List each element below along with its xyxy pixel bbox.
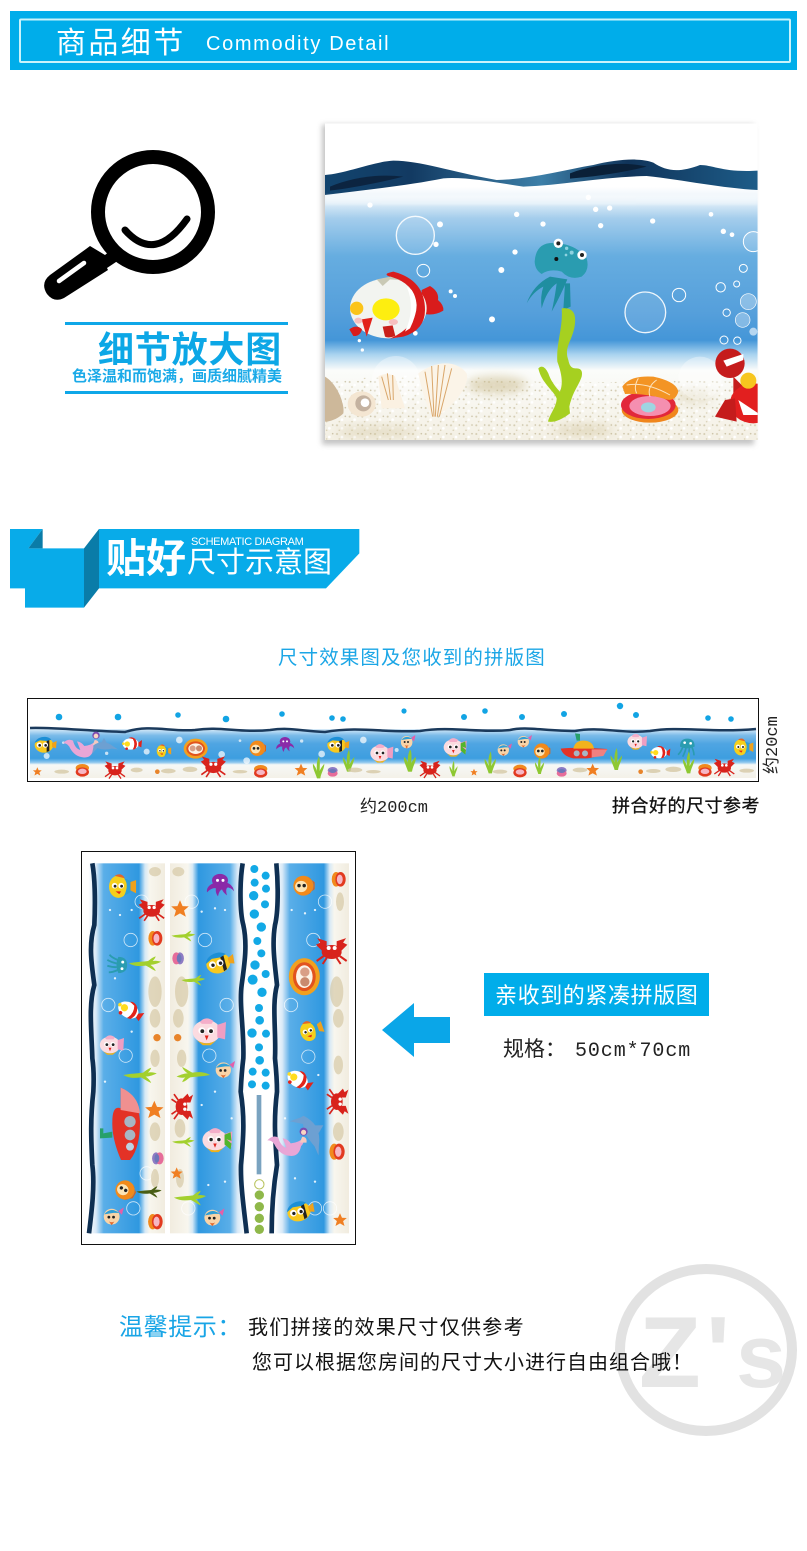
bubbles bbox=[358, 195, 763, 404]
banner English subtitle: SCHEMATIC DIAGRAM bbox=[191, 536, 304, 548]
strip submarine bbox=[561, 733, 607, 758]
header English title: Commodity Detail bbox=[206, 33, 390, 55]
strip characters bbox=[33, 732, 754, 779]
sheet column 1 bbox=[88, 863, 165, 1233]
text: sheet specification: 规格： bbox=[503, 1040, 566, 1063]
watermark: Z's logo: ' bbox=[706, 1297, 730, 1409]
sheet submarine bbox=[100, 1088, 140, 1160]
note heading: 温馨提示： bbox=[119, 1314, 242, 1341]
arrow pointing to sheet bbox=[382, 1003, 450, 1057]
seashell bbox=[325, 363, 467, 422]
crab bbox=[715, 348, 758, 424]
label: compact layout bbox=[484, 973, 709, 1016]
note line two: 您可以根据您房间的尺寸大小进行自由组合哦！ bbox=[252, 1351, 693, 1374]
text: sheet specification: 50cm*70cm bbox=[575, 1040, 691, 1063]
label: compact layout: 亲收到的紧凑拼版图 bbox=[495, 983, 698, 1008]
sand bed bbox=[325, 375, 758, 440]
dimension label: width: 约200cm bbox=[360, 797, 428, 818]
watermark: Z's logo: s bbox=[736, 1307, 786, 1407]
panel: compact sticker sheet bbox=[82, 852, 356, 1244]
strip water band bbox=[30, 729, 756, 778]
panel: underwater detail photo bbox=[322, 123, 777, 445]
dimension label: assembled size reference: 拼合好的尺寸参考 bbox=[612, 796, 760, 816]
sheet bubbles bbox=[102, 895, 337, 1215]
jellyfish bbox=[527, 239, 588, 312]
section heading: size and layout: 尺寸效果图及您收到的拼版图 bbox=[278, 647, 546, 669]
note line one: 我们拼接的效果尺寸仅供参考 bbox=[248, 1316, 525, 1339]
sheet column 3 bbox=[275, 863, 349, 1233]
dimension label: height: 约20cm bbox=[762, 716, 783, 774]
banner thin title: 尺寸示意图 bbox=[187, 546, 332, 579]
caption: detail enlargement bbox=[65, 322, 288, 394]
sheet shell details bbox=[148, 867, 344, 1188]
seaweed bbox=[538, 308, 582, 422]
water surface bbox=[325, 160, 758, 195]
icon: magnifying glass bbox=[44, 157, 208, 300]
strip wave line bbox=[30, 728, 756, 732]
panel: assembled strip preview bbox=[28, 698, 758, 782]
strip blue drops bbox=[56, 703, 734, 722]
header banner: Commodity Detail bbox=[10, 11, 797, 70]
sheet column 2 bbox=[170, 863, 245, 1233]
section banner: schematic diagram bbox=[10, 529, 359, 608]
sheet drop column bbox=[247, 865, 270, 1090]
clownfish bbox=[349, 272, 443, 339]
sheet characters bbox=[100, 872, 347, 1229]
watermark: Z's logo: Z bbox=[639, 1297, 701, 1409]
header Chinese title: 商品细节 bbox=[56, 27, 186, 60]
caption subtext: 色泽温和而饱满，画质细腻精美 bbox=[72, 367, 282, 385]
sheet wave edges bbox=[89, 863, 278, 1233]
caption heading: 细节放大图 bbox=[98, 329, 282, 370]
clam bbox=[621, 376, 678, 423]
watermark: Z's logo bbox=[620, 1269, 792, 1431]
sheet small label strip bbox=[255, 1095, 264, 1234]
banner bold title: 贴好 bbox=[106, 537, 186, 581]
